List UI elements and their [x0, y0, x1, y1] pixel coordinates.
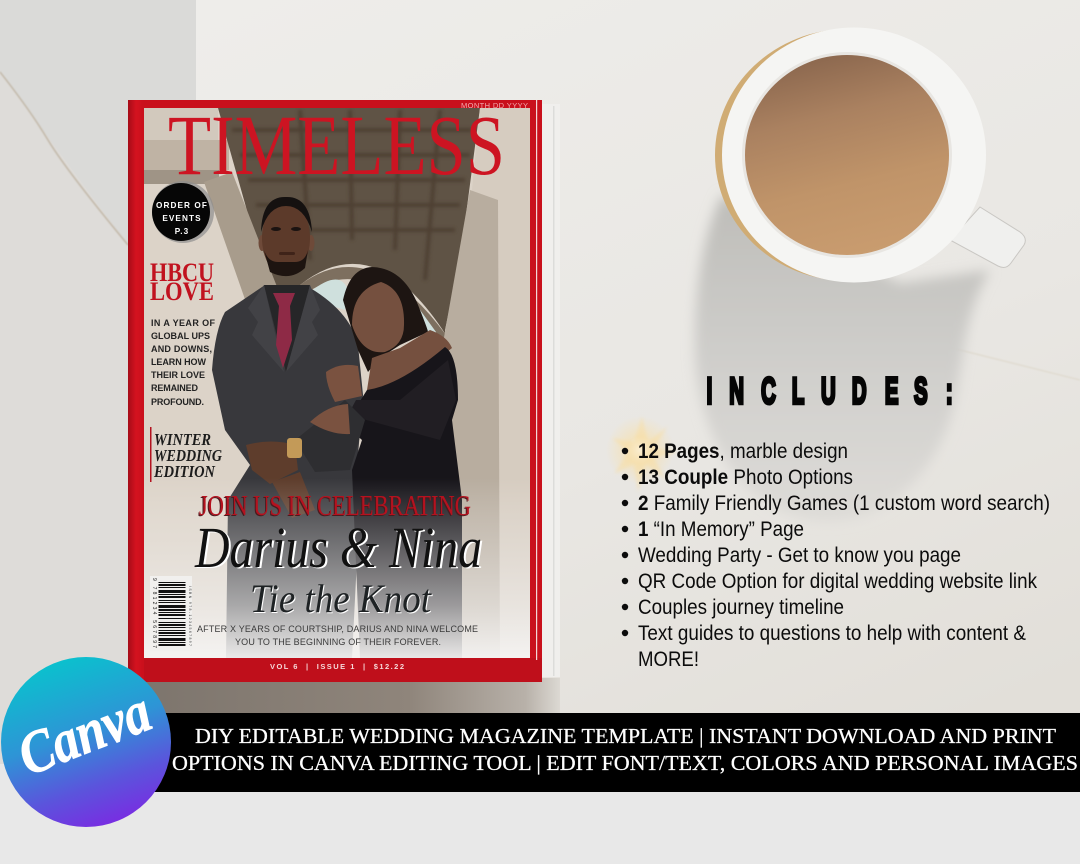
names: Darius and Nina: Darius & Nina	[196, 516, 484, 581]
heading: join us in celebrating: JOIN US IN CELEBRATING	[198, 492, 470, 523]
groom	[212, 197, 363, 658]
cup shadow	[695, 195, 990, 521]
text block: feature blurb: LEARN HOW	[151, 357, 206, 367]
text block: feature blurb: PROFOUND.	[151, 397, 204, 407]
names: Darius and Nina: Darius & Nina	[194, 515, 482, 580]
banner: black title bar: OPTIONS IN CANVA EDITING TOOL | EDIT FONT/TEXT, COLORS AND PERSONAL IMAGES	[172, 751, 1078, 775]
heading: HBCU love: LOVE	[150, 277, 214, 306]
issue strip: VOL 6 | ISSUE 1 | $12.22	[270, 662, 404, 671]
list bullets	[622, 448, 628, 636]
icon: coffee cup	[715, 28, 1025, 282]
feature list: 12 Pages, marble design	[638, 439, 848, 463]
feature list: Wedding Party - Get to know you page	[638, 543, 961, 567]
bride	[246, 267, 462, 658]
magazine page edges	[540, 104, 560, 677]
callout: winter wedding edition	[150, 427, 223, 482]
text block: courtship line: YOU TO THE BEGINNING OF THEIR FOREVER.	[235, 637, 441, 647]
decorative starburst	[606, 416, 678, 492]
feature list: QR Code Option for digital wedding website link	[638, 569, 1037, 593]
heading: HBCU love: HBCU	[150, 258, 214, 287]
text block: feature blurb: IN A YEAR OF	[151, 318, 216, 328]
callout: winter wedding edition: WINTER	[154, 430, 211, 449]
badge: order of events	[152, 181, 214, 243]
badge: order of events: P.3	[175, 227, 189, 236]
masthead: TIMELESS	[168, 97, 505, 193]
banner: black title bar	[150, 713, 1080, 792]
feature list	[622, 439, 1050, 671]
subheading: tie the knot: Tie the Knot	[250, 576, 432, 621]
text block: feature blurb: THEIR LOVE	[151, 370, 205, 380]
badge: order of events: ORDER OF	[156, 201, 208, 210]
text block: courtship line: AFTER X YEARS OF COURTSHIP, DARIUS AND NINA WELCOME	[197, 624, 478, 634]
cover photo: couple under stone arch	[144, 108, 530, 660]
icon: Canva badge	[1, 657, 171, 827]
feature list: 1 “In Memory” Page	[638, 517, 804, 541]
magazine	[128, 97, 560, 682]
callout: winter wedding edition: WEDDING	[154, 446, 223, 465]
cover red inner line	[536, 100, 537, 660]
cup handle	[950, 207, 1025, 267]
feature list: 13 Couple Photo Options	[638, 465, 853, 489]
heading: includes: INCLUDES:	[707, 371, 953, 412]
feature list: MORE!	[638, 647, 699, 671]
issue date: MONTH DD YYYY	[461, 101, 528, 110]
barcode: 9 781234 567897	[151, 578, 157, 648]
text block: feature blurb: REMAINED	[151, 383, 198, 393]
subheading: tie the knot: Tie the Knot	[251, 577, 433, 622]
callout: winter wedding edition: EDITION	[153, 462, 216, 481]
cup gold saucer edge	[715, 29, 981, 281]
feature list: Text guides to questions to help with content &	[638, 621, 1026, 645]
icon: Canva badge: Canva	[9, 678, 160, 788]
badge: order of events: EVENTS	[162, 214, 202, 223]
arms and hands	[295, 400, 365, 472]
barcode	[150, 576, 192, 651]
barcode: ISBN 978-1234567897	[188, 586, 192, 646]
text block: feature blurb: GLOBAL UPS	[151, 331, 210, 341]
heading: join us in celebrating: JOIN US IN CELEBRATING	[199, 491, 471, 522]
feature list: Couples journey timeline	[638, 595, 844, 619]
banner: black title bar: DIY EDITABLE WEDDING MAGAZINE TEMPLATE | INSTANT DOWNLOAD AND PRINT	[195, 724, 1056, 748]
text block: feature blurb: AND DOWNS,	[151, 344, 212, 354]
